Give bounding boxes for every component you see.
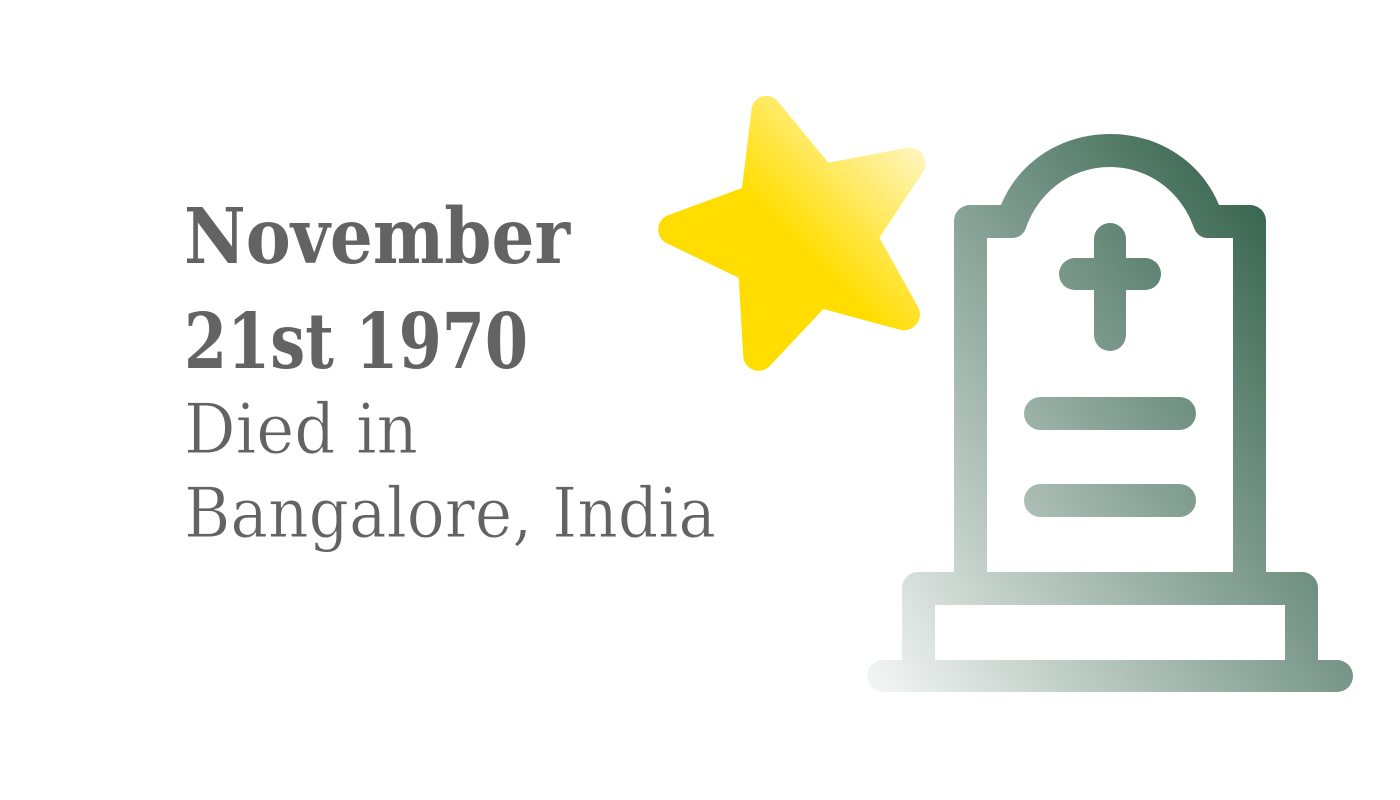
icon: gravestone: [867, 134, 1353, 692]
date heading: November: [184, 192, 571, 282]
inscription line 1: [1024, 397, 1196, 430]
gravestone outline: [867, 134, 1353, 692]
icon: star: [658, 96, 925, 371]
place of death text: [184, 390, 716, 554]
cross: [1059, 223, 1161, 351]
place of death text: Bangalore, India: [184, 474, 716, 554]
date heading: 21st 1970: [184, 297, 528, 387]
place of death text: Died in: [184, 390, 418, 470]
inscription line 2: [1024, 484, 1196, 517]
date heading: [184, 192, 571, 387]
